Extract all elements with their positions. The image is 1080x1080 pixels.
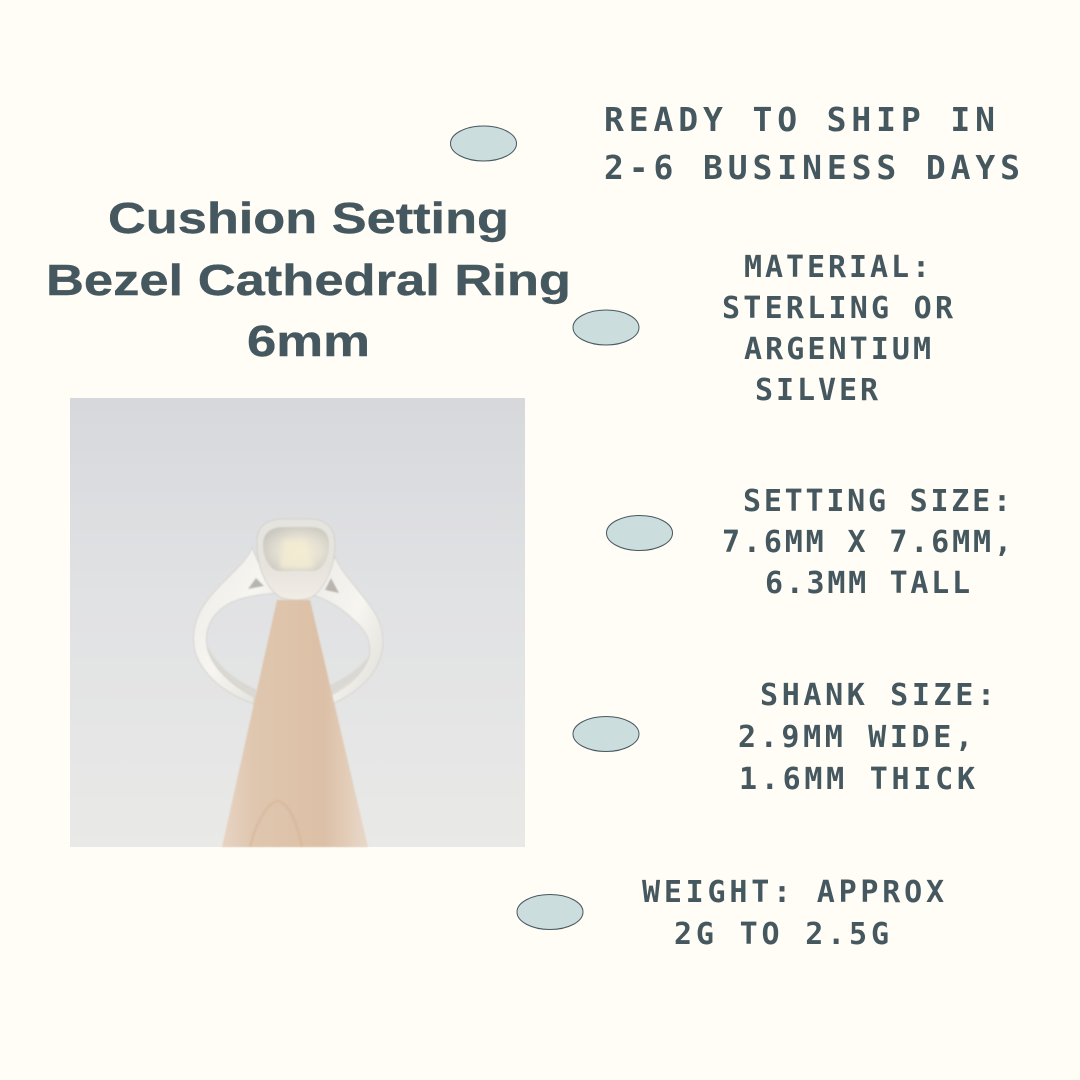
text: shank size: 1.6MM THICK bbox=[739, 762, 975, 797]
inner surface of band bbox=[207, 645, 370, 698]
stone highlight bbox=[280, 540, 314, 568]
text: setting size: 7.6MM X 7.6MM, bbox=[722, 525, 1012, 560]
text: material: STERLING OR bbox=[722, 291, 954, 326]
bezel shadow accents bbox=[248, 578, 339, 593]
bullet 3 bbox=[606, 516, 672, 550]
text: shipping: READY TO SHIP IN bbox=[604, 100, 995, 139]
text: material bbox=[722, 250, 954, 408]
text: shank size: 2.9MM WIDE, bbox=[738, 720, 973, 755]
bullet 2 bbox=[573, 310, 639, 345]
ring illustration bbox=[194, 519, 383, 847]
text: material: SILVER bbox=[755, 373, 879, 408]
text: weight: WEIGHT: APPROX bbox=[642, 875, 944, 910]
bullet 4 bbox=[573, 716, 639, 752]
text: shipping bbox=[604, 100, 1020, 187]
left shank bbox=[194, 548, 280, 704]
text: setting size: SETTING SIZE: bbox=[743, 484, 1011, 519]
title: Bezel Cathedral Ring bbox=[46, 256, 571, 305]
title: Cushion Setting bbox=[108, 194, 509, 243]
photo backdrop bbox=[70, 398, 525, 847]
text: material: MATERIAL: bbox=[744, 250, 930, 285]
text: weight bbox=[642, 875, 944, 952]
text: weight: 2G TO 2.5G bbox=[674, 917, 889, 952]
text: material: ARGENTIUM bbox=[744, 332, 931, 367]
text: setting size bbox=[722, 484, 1012, 601]
title: 6mm bbox=[247, 317, 370, 366]
title bbox=[46, 194, 571, 366]
text: shank size bbox=[738, 678, 995, 797]
bullet 1 bbox=[450, 126, 516, 161]
wood grain bbox=[250, 801, 302, 847]
stone cup bbox=[263, 527, 329, 571]
bezel setting bbox=[257, 519, 335, 600]
right shank bbox=[313, 557, 383, 705]
text: setting size: 6.3MM TALL bbox=[765, 566, 970, 601]
product photo: ring on wooden cone bbox=[70, 398, 525, 847]
text: shank size: SHANK SIZE: bbox=[760, 678, 995, 713]
bullet 5 bbox=[517, 894, 583, 930]
text: shipping: 2-6 BUSINESS DAYS bbox=[604, 148, 1020, 187]
wooden cone bbox=[222, 600, 368, 847]
